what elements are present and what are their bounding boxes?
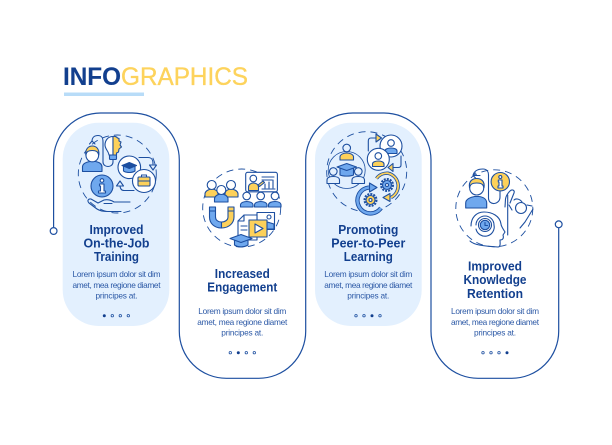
text block: amet, mea regione diamet bbox=[72, 280, 161, 290]
connector outline bbox=[50, 113, 562, 378]
text block: Lorem ipsum dolor sit dim bbox=[451, 306, 539, 316]
heading bbox=[84, 222, 150, 264]
pagination dots bbox=[482, 351, 508, 354]
text block: amet, mea regione diamet bbox=[324, 280, 413, 290]
heading: Promoting bbox=[338, 222, 398, 237]
heading: Improved bbox=[468, 258, 522, 274]
panel: highlighted backgrounds bbox=[63, 123, 422, 326]
text block: principes at. bbox=[96, 290, 138, 300]
heading: Improved bbox=[90, 222, 144, 237]
text block: principes at. bbox=[347, 290, 389, 300]
heading: Engagement bbox=[207, 280, 278, 294]
icon: on-the-job training bbox=[78, 135, 156, 213]
heading bbox=[464, 258, 526, 301]
pagination dots bbox=[229, 351, 256, 354]
heading: Peer-to-Peer bbox=[331, 236, 405, 250]
text block: principes at. bbox=[221, 328, 263, 338]
heading bbox=[331, 222, 405, 264]
heading: Learning bbox=[344, 249, 393, 264]
text block bbox=[72, 269, 161, 300]
heading: Increased bbox=[215, 266, 270, 281]
title: INFOGRAPHICS bbox=[63, 63, 248, 91]
heading: Training bbox=[94, 249, 139, 264]
text block: amet, mea regione diamet bbox=[197, 317, 288, 327]
heading: Knowledge bbox=[464, 272, 526, 287]
heading: Retention bbox=[467, 286, 523, 301]
panel: improved on-the-job training bbox=[72, 135, 161, 317]
panel: increased engagement bbox=[197, 169, 288, 354]
heading: On-the-Job bbox=[84, 236, 150, 250]
text block: amet, mea regione diamet bbox=[451, 317, 540, 327]
text block: principes at. bbox=[474, 328, 516, 338]
panel: improved knowledge retention bbox=[451, 169, 540, 354]
text block bbox=[451, 306, 540, 338]
panel: promoting peer-to-peer learning bbox=[324, 132, 413, 317]
text block: Lorem ipsum dolor sit dim bbox=[198, 306, 286, 316]
pagination dots bbox=[103, 314, 130, 317]
text block bbox=[324, 269, 413, 300]
pagination dots bbox=[355, 314, 381, 317]
text block: Lorem ipsum dolor sit dim bbox=[324, 269, 412, 279]
icon: knowledge retention bbox=[456, 169, 533, 247]
text block: Lorem ipsum dolor sit dim bbox=[72, 269, 161, 279]
heading bbox=[207, 266, 278, 294]
icon: peer-to-peer learning bbox=[327, 132, 407, 213]
text block bbox=[197, 306, 288, 338]
icon: increased engagement bbox=[203, 169, 281, 247]
